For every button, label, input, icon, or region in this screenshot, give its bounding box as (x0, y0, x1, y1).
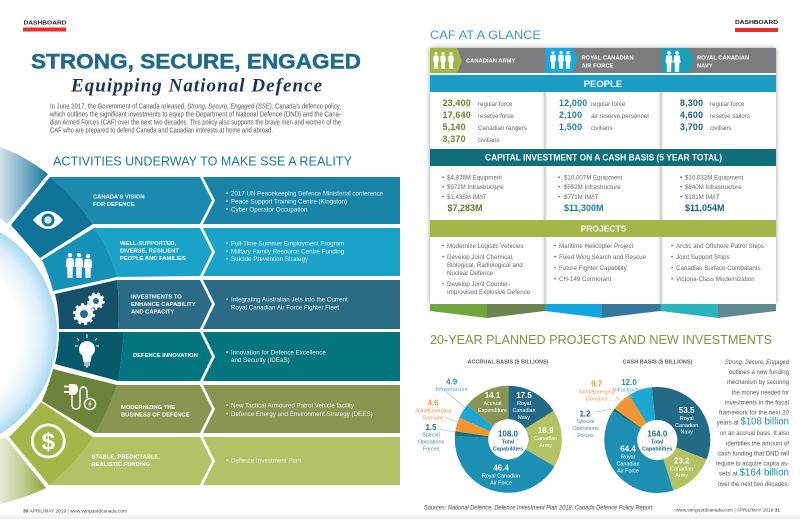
sources note: Sources: National Defence, Defence Investment Plan 2018, Canada Defence Policy Report. (424, 504, 654, 512)
centre total: Capabilities (642, 446, 672, 452)
slice labels: Canadian (616, 462, 640, 468)
row label: AND CAPACITY (131, 310, 175, 316)
row bullets: Royal Canadian Air Force Fighter Fleet (231, 305, 339, 312)
slice labels: Canadian (534, 436, 557, 442)
intro paragraph: CAF who are prepared to defend Canada and Canadian interests at home and abroad. (50, 128, 273, 134)
band: capital investment: CAPITAL INVESTMENT ON A CASH BASIS (5 YEAR TOTAL) (485, 152, 722, 164)
outside labels: Infrastructure (613, 388, 645, 394)
icon: gears (74, 294, 104, 324)
row bullets: Innovation for Defence Excellence (231, 349, 326, 356)
people: army: 17,640 (442, 110, 471, 120)
projects: army: • (442, 254, 444, 261)
slice labels: Royal (621, 454, 635, 460)
people: army: 23,400 (442, 98, 471, 108)
text block: funding mechanism: years at $108 billion (717, 416, 789, 428)
projects: navy: Canadian Surface Combatants (676, 265, 761, 272)
capital: navy: $11,054M (685, 203, 725, 213)
row label: REALISTIC FUNDING (92, 462, 151, 468)
outside labels: Domains (586, 396, 608, 402)
slice labels: Navy (681, 430, 693, 436)
panel: CAF table (430, 48, 776, 304)
row: Canada's vision for defence (11, 177, 400, 258)
slice labels: Air Force (490, 480, 512, 486)
row: defence innovation (55, 332, 400, 381)
projects: navy: Arctic and Offshore Patrol Ships (676, 243, 764, 250)
centre total: 164.0 (647, 430, 668, 438)
outside labels: Joint/Emerging (415, 408, 451, 414)
text block: funding mechanism: on an accrual basis. It also (720, 430, 789, 437)
outside labels (572, 378, 645, 439)
people: air force: air reserve personnel (591, 113, 649, 120)
row: stable, predictable, realistic funding (9, 402, 400, 485)
capital: air force: $10,007M Equipment (564, 174, 623, 182)
projects: army: Biological, Radiological and (447, 262, 523, 269)
projects: air force: • (554, 276, 556, 283)
slice labels: Army (675, 473, 688, 479)
outside labels: Operations (572, 426, 599, 432)
band: people (430, 75, 776, 92)
row bullets: • (226, 199, 228, 206)
row label (121, 405, 190, 419)
section tag: dashboard right (735, 20, 778, 32)
people: army: Canadian rangers (478, 125, 527, 132)
intro paragraph: In June 2017, the Government of Canada released, Strong, Secure, Engaged (SSE), Canada’s defence policy, (50, 104, 341, 110)
row bullets: New Tactical Armoured Patrol Vehicle facility (231, 403, 355, 410)
people: army: 5,140 (442, 122, 466, 132)
row label (93, 195, 145, 208)
slice labels: Canadian (670, 466, 693, 472)
projects: navy: • (671, 254, 673, 261)
capital: army: $972M Infrastructure (447, 184, 504, 191)
people: army (442, 98, 527, 144)
header cell: Royal Canadian Navy (661, 48, 749, 73)
intro paragraph (49, 104, 341, 134)
row bullets: Suicide Prevention Strategy (231, 256, 309, 263)
outside labels (415, 378, 468, 452)
text block: funding mechanism: require to acquire capita as- (716, 460, 789, 468)
people: army: civilians (478, 137, 500, 144)
capital: army: $1,435M IM/IT (447, 194, 487, 201)
heading: 20-year projects: 20-YEAR PLANNED PROJECTS AND NEW INVESTMENTS (430, 333, 772, 347)
slice labels (478, 391, 557, 486)
row bullets: Cyber Operator Occupation (231, 206, 308, 214)
band: people: PEOPLE (584, 79, 622, 90)
people: army: 3,370 (442, 134, 466, 144)
row label: DEFENCE INNOVATION (133, 353, 198, 359)
donut slices (457, 388, 560, 491)
capital: navy: • (680, 174, 682, 182)
table footer chevrons (430, 304, 776, 318)
text block: funding mechanism: investments in the fiscal (725, 400, 789, 406)
row bullets: Full-Time Summer Employment Program (231, 240, 344, 248)
slice labels: 64.4 (620, 444, 636, 454)
people: air force: civilians (591, 125, 612, 132)
row bullets: • (226, 458, 228, 465)
capital: navy (680, 174, 744, 213)
row label: PEOPLE AND FAMILIES (120, 256, 186, 262)
text block: funding mechanism (716, 359, 790, 488)
text block: funding mechanism: the money needed for (732, 390, 790, 396)
row label: BUSINESS OF DEFENCE (121, 413, 190, 419)
text block: funding mechanism: over the next two decades. (718, 481, 789, 488)
projects: air force: Fixed Wing Search and Rescue (559, 254, 647, 261)
icon: light bulb (75, 334, 99, 368)
slice labels: 18.9 (538, 426, 554, 435)
projects: navy (671, 243, 764, 283)
chart title: CASH BASIS ($ BILLIONS) (622, 360, 693, 366)
slice labels: Royal (517, 401, 531, 407)
outside labels: 9.7 (591, 380, 603, 388)
capital: air force: $11,300M (564, 203, 604, 213)
row label (120, 241, 186, 262)
row label: INVESTMENTS TO (131, 295, 182, 301)
chart title: ACCRUAL BASIS ($ BILLIONS) (468, 360, 549, 366)
section tag: dashboard left (23, 20, 67, 32)
row bullets: and Security (IDEaS) (231, 357, 290, 364)
icon: plug (64, 384, 96, 410)
header cell: Canadian Army (430, 48, 516, 73)
capital: army: $7,283M (448, 203, 483, 213)
row label: MODERNIZING THE (121, 405, 176, 411)
row bullets: • (226, 349, 228, 356)
projects: army: Nuclear Defence (447, 270, 494, 277)
heading: activities: ACTIVITIES UNDERWAY TO MAKE SSE A REALITY (53, 154, 353, 168)
projects: air force: • (554, 254, 556, 261)
people: navy: regular force (710, 101, 745, 108)
slice labels (616, 406, 698, 479)
centre total: Total (651, 440, 664, 446)
icon: three people (66, 253, 92, 278)
capital: air force: • (558, 194, 560, 201)
row bullets: • (226, 240, 228, 248)
people: navy: 4,600 (680, 110, 703, 120)
capital: army (442, 174, 504, 213)
projects: navy: Joint Support Ships (676, 254, 730, 261)
outer arc: green (0, 438, 46, 504)
row bullets: Defence Energy and Environment Strategy (DEES) (231, 411, 373, 418)
text block: funding mechanism: framework for the next 20 (719, 410, 789, 416)
row bullets (226, 240, 345, 263)
heading: CAF at a glance: CAF AT A GLANCE (430, 28, 541, 42)
slice labels: Navy (518, 415, 530, 421)
projects: army: • (442, 281, 444, 288)
projects: army (442, 243, 531, 296)
footer right: www.vanguardcanada.com | APRIL/MAY 2019 31 (676, 508, 780, 514)
slice labels: 53.5 (679, 406, 695, 415)
subtitle: Equipping National Defence (70, 76, 323, 96)
slice labels: Royal Canadian (482, 474, 520, 480)
donut slices (606, 389, 708, 491)
row label: DIVERSE, RESILIENT (120, 248, 179, 254)
outside labels: Domains (422, 416, 444, 422)
projects: army: Develop Joint Counter- (447, 281, 510, 288)
row label: WELL-SUPPORTED, (120, 241, 176, 247)
text block: funding mechanism: outlines a new funding (729, 369, 789, 376)
capital: navy: • (680, 184, 682, 191)
row bullets: Peace Support Training Centre (Kingston) (231, 199, 347, 206)
band: capital investment (430, 149, 776, 166)
row: investments to enhance capability (55, 280, 400, 329)
centre total (637, 420, 677, 460)
capital: air force: $771M IM/IT (564, 194, 599, 201)
chart: cash basis donut (572, 360, 708, 491)
outside labels: 4.9 (446, 378, 458, 386)
capital: navy: $10,032M Equipment (685, 174, 744, 182)
capital: navy: $840M Infrastructure (685, 184, 742, 191)
projects: navy: Victoria-Class Modernization (676, 276, 755, 283)
text block: funding mechanism: cash funding that DND will (718, 450, 789, 458)
projects: air force: • (554, 243, 556, 250)
row bullets (226, 191, 384, 214)
slice labels: Air Force (617, 468, 639, 474)
projects: air force: • (554, 265, 556, 272)
capital: navy: $181M IM/IT (685, 194, 720, 201)
people: navy: civilians (710, 125, 732, 132)
hub disc (0, 215, 57, 451)
outside labels: Special (422, 432, 440, 438)
header cell: Royal Canadian Navy: ROYAL CANADIAN (697, 56, 749, 62)
row bullets (226, 349, 326, 364)
row bullets: • (226, 191, 228, 198)
outside labels: Forces (423, 446, 440, 452)
chart: accrual basis donut (415, 360, 560, 491)
outside labels: 1.2 (579, 410, 591, 418)
people: navy: reserve sailors (710, 113, 750, 120)
outside labels: 1.5 (425, 423, 437, 432)
slice labels: 23.2 (674, 456, 690, 466)
people: navy: 3,700 (680, 122, 703, 132)
slice labels: Canadian (675, 423, 698, 429)
row bullets (226, 297, 348, 312)
band: projects (430, 220, 776, 237)
icon: dollar (32, 425, 64, 457)
people: army: regular force (478, 101, 513, 108)
row label: CANADA’S VISION (93, 195, 145, 201)
outside labels: Forces (577, 433, 594, 439)
row bullets: • (226, 297, 228, 304)
slice labels: Canadian (512, 408, 536, 414)
row label: FOR DEFENCE (93, 202, 135, 208)
projects: army: Develop Joint Chemical, (447, 254, 514, 261)
slice labels: Accrual (484, 401, 501, 407)
projects: army: • (442, 243, 444, 250)
leader lines (438, 392, 465, 432)
outside labels: Operations (418, 440, 444, 446)
row bullets: • (226, 403, 228, 410)
slice labels: 17.5 (516, 391, 532, 400)
icon: dollar: $ (42, 428, 56, 456)
capital: army: $4,876M Equipment (447, 174, 502, 182)
centre total (488, 419, 528, 459)
capital: army: • (442, 174, 444, 182)
projects: navy: • (671, 243, 673, 250)
capital: army: • (442, 184, 444, 191)
section tag: dashboard left: DASHBOARD (24, 20, 67, 26)
header cell: Canadian Army: CANADIAN ARMY (466, 59, 516, 65)
slice labels: Expenditure (478, 408, 507, 414)
row label: ENHANCE CAPABILITY (131, 302, 196, 308)
people: air force: 12,000 (559, 98, 587, 108)
projects: air force: Future Fighter Capability (559, 265, 628, 272)
header cell: Royal Canadian Air Force (545, 48, 634, 73)
slice labels: Royal (680, 416, 694, 422)
text block: funding mechanism: mechanism by securing (727, 379, 789, 386)
capital: air force (558, 174, 623, 213)
footer left: 30 APRIL/MAY 2019 | www.vanguardcanada.com (23, 508, 127, 514)
row bullets: Defence Investment Plan (231, 458, 301, 465)
outside labels: Special (577, 419, 594, 425)
people: navy (680, 98, 750, 132)
capital: air force: $552M Infrastructure (564, 184, 621, 191)
projects: air force: Maritime Helicopter Project (559, 243, 634, 250)
slice labels: Army (539, 443, 552, 449)
row label (131, 295, 196, 316)
centre total: Capabilities (493, 446, 523, 452)
people: army: reserve force (478, 113, 514, 120)
header cell: Royal Canadian Navy: NAVY (697, 64, 713, 70)
outside labels: 4.6 (427, 398, 439, 408)
centre total: 108.0 (498, 430, 519, 438)
slice labels: 14.1 (485, 391, 501, 400)
row bullets: Integrating Australian Jets into the Current (231, 297, 348, 304)
text block: funding mechanism: Strong, Secure, Engaged (725, 359, 789, 366)
people: air force: 2,100 (559, 110, 582, 120)
row bullets: Military Family Resource Centre Funding (231, 248, 345, 256)
row: well-supported people and families (42, 228, 400, 291)
row bullets (226, 403, 373, 418)
outside labels: Infrastructure (436, 387, 468, 393)
people: navy: 8,300 (680, 98, 703, 108)
projects: air force: CH-149 Cormorant (559, 276, 612, 283)
row: modernizing the business of defence (42, 369, 400, 433)
projects: army: Modernize Logistic Vehicles (447, 243, 523, 250)
capital: army: • (442, 194, 444, 201)
people: air force: regular force (591, 101, 626, 108)
text block: funding mechanism: identifies the amount of (726, 440, 789, 448)
header cell: Royal Canadian Air Force: ROYAL CANADIAN (582, 56, 634, 62)
capital: navy: • (680, 194, 682, 201)
row bullets: • (226, 248, 228, 256)
title: STRONG, SECURE, ENGAGED (31, 50, 361, 74)
row bullets: • (226, 206, 228, 214)
projects: air force (554, 243, 647, 283)
row label (92, 454, 160, 468)
outer arc: blue (0, 147, 48, 224)
outside labels: Joint/Emerging (579, 390, 615, 396)
people: air force: 1,500 (559, 122, 582, 132)
outside labels: 12.0 (621, 378, 637, 387)
row bullets: • (226, 411, 228, 418)
projects: navy: • (671, 265, 673, 272)
header: service branches (430, 48, 776, 73)
projects: army: Improvised Explosive Defence (447, 289, 531, 296)
header cell: Royal Canadian Air Force: AIR FORCE (582, 64, 614, 70)
row bullets: 2017 UN Peacekeeping Defence Ministerial conference (231, 191, 384, 198)
icon: eye (33, 211, 63, 229)
projects: navy: • (671, 276, 673, 283)
slice labels: 46.4 (493, 464, 509, 472)
intro paragraph: which outlines the significant investments to equip the Department of National Defence (DND) and the Cana- (49, 112, 341, 118)
row label: STABLE, PREDICTABLE, (92, 454, 160, 460)
capital: air force: • (558, 174, 560, 182)
centre total: Total (502, 440, 515, 446)
row bullets: • (226, 256, 228, 263)
band: projects: PROJECTS (581, 224, 627, 234)
leader lines (595, 392, 633, 412)
intro paragraph: dian Armed Forces (CAF) over the next two decades. This policy also supports the brave men and women of the (50, 120, 341, 126)
text block: funding mechanism: sets at $164 billion (719, 466, 789, 478)
capital: air force: • (558, 184, 560, 191)
people: air force (559, 98, 649, 132)
section tag: dashboard right: DASHBOARD (735, 20, 778, 26)
